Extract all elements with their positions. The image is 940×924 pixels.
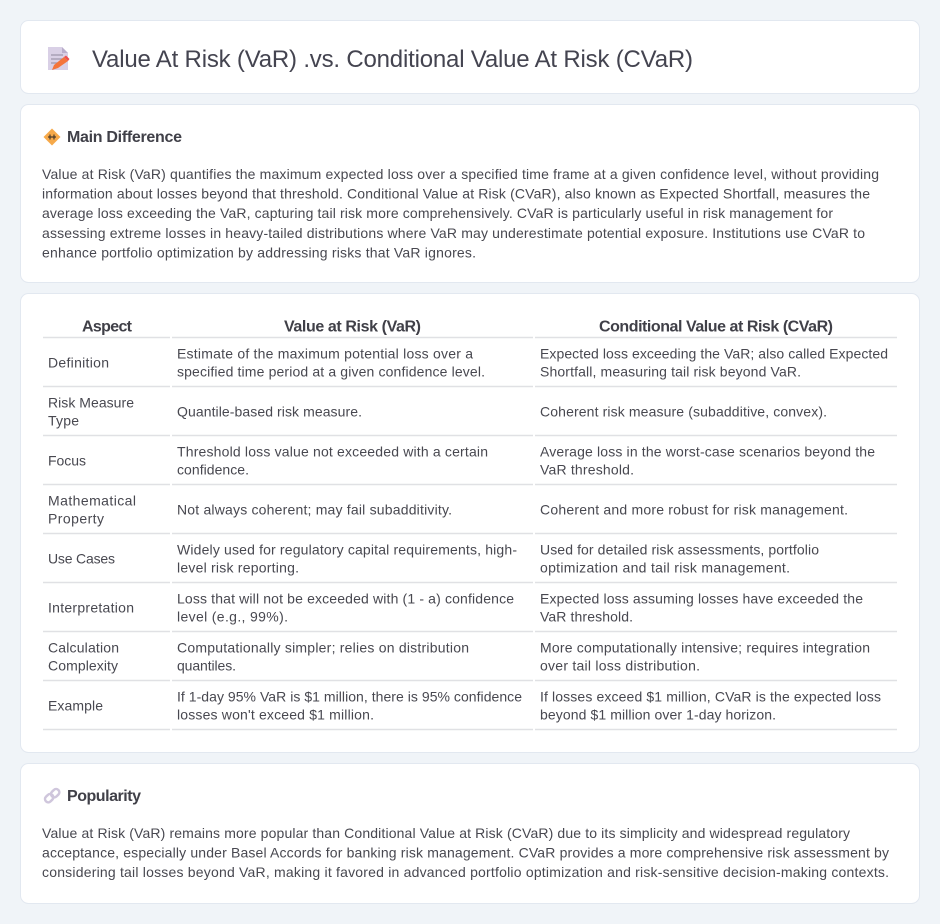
text block: popularity: considering tail losses beyond VaR, making it favored in advanced portfolio optimization and risk-sensitive decision-making contexts. <box>42 864 889 880</box>
icon: orange diamond <box>44 128 60 146</box>
row: use cases <box>48 542 819 576</box>
row: focus: VaR threshold. <box>540 462 634 478</box>
row: calculation complexity <box>48 640 870 674</box>
row: interpretation: Loss that will not be exceeded with (1 - a) confidence <box>177 590 514 606</box>
row: use cases: level risk reporting. <box>177 560 299 576</box>
icon: document with pencil <box>48 47 70 70</box>
row: focus: Focus <box>48 452 86 468</box>
row: calculation complexity: More computationally intensive; requires integration <box>540 640 870 656</box>
row: mathematical property: Coherent and more robust for risk management. <box>540 502 848 518</box>
row: interpretation: Interpretation <box>48 600 134 616</box>
row: example: Example <box>48 698 103 714</box>
row: definition: Expected loss exceeding the VaR; also called Expected <box>540 346 888 362</box>
text block: main difference <box>42 166 879 260</box>
row: example: beyond $1 million over 1-day horizon. <box>540 707 776 723</box>
row: use cases: optimization and tail risk management. <box>540 560 790 576</box>
row: risk measure type: Coherent risk measure (subadditive, convex). <box>540 404 827 420</box>
row: risk measure type: Risk Measure <box>48 394 134 410</box>
text block: main difference: enhance portfolio optimization by addressing risks that VaR ignores. <box>42 244 476 260</box>
row: risk measure type: Quantile-based risk measure. <box>177 404 362 420</box>
table header row <box>82 319 833 336</box>
row: mathematical property: Not always coherent; may fail subadditivity. <box>177 502 452 518</box>
row: calculation complexity: Complexity <box>48 658 118 674</box>
row: mathematical property: Property <box>48 511 104 527</box>
panel: popularity <box>20 764 920 904</box>
heading: main difference: Main Difference <box>67 129 182 146</box>
row: interpretation: level (e.g., 99%). <box>177 609 288 625</box>
text block: main difference: information about losses beyond that threshold. Conditional Value at Risk (CVaR), also known as Expected Shortfall, measures the <box>42 186 870 202</box>
row: definition <box>48 346 888 380</box>
row: example: If 1-day 95% VaR is $1 million, there is 95% confidence <box>177 688 522 704</box>
row: focus <box>48 444 875 478</box>
table header row: Value at Risk (VaR) <box>284 319 421 336</box>
row: calculation complexity: over tail loss distribution. <box>540 658 700 674</box>
table header row: Conditional Value at Risk (CVaR) <box>599 319 833 336</box>
row: calculation complexity: Computationally simpler; relies on distribution <box>177 640 469 656</box>
row: focus: Threshold loss value not exceeded with a certain <box>177 444 488 460</box>
text block: main difference: assessing extreme losses in heavy-tailed distributions where VaR may underestimate potential exposure. Institutions use CVaR to <box>42 225 865 241</box>
text block: main difference: Value at Risk (VaR) quantifies the maximum expected loss over a specified time frame at a given confidence level, without providing <box>42 166 879 182</box>
panel: main difference <box>20 104 920 282</box>
row: example: losses won't exceed $1 million. <box>177 707 374 723</box>
row: risk measure type <box>48 394 827 429</box>
text block: popularity: acceptance, especially under Basel Accords for banking risk management. CVaR provides a more comprehensive risk assessment by <box>42 845 889 861</box>
row: use cases: Widely used for regulatory capital requirements, high- <box>177 542 517 558</box>
table header row: Aspect <box>82 319 133 336</box>
icon: chain link <box>44 788 61 804</box>
heading: popularity: Popularity <box>67 788 141 805</box>
row: definition: Definition <box>48 354 109 370</box>
row: focus: confidence. <box>177 462 249 478</box>
row: interpretation <box>48 590 863 625</box>
title: Value At Risk (VaR) .vs. Conditional Value At Risk (CVaR) <box>92 46 693 73</box>
row: mathematical property: Mathematical <box>48 492 136 508</box>
row: interpretation: VaR threshold. <box>540 609 633 625</box>
row: mathematical property <box>48 492 848 527</box>
row: example: If losses exceed $1 million, CVaR is the expected loss <box>540 688 881 704</box>
text block: main difference: average loss exceeding the VaR, capturing tail risk more comprehensively. CVaR is particularly useful in risk management for <box>42 205 833 221</box>
panel: title header <box>20 20 920 94</box>
panel: comparison table <box>20 294 920 752</box>
row: risk measure type: Type <box>48 413 79 429</box>
text block: popularity <box>42 825 889 880</box>
row: definition: specified time period at a given confidence level. <box>177 364 485 380</box>
row: use cases: Use Cases <box>48 550 115 566</box>
row: use cases: Used for detailed risk assessments, portfolio <box>540 542 819 558</box>
row: definition: Estimate of the maximum potential loss over a <box>177 346 473 362</box>
row: focus: Average loss in the worst-case scenarios beyond the <box>540 444 875 460</box>
row: calculation complexity: quantiles. <box>177 658 236 674</box>
row: example <box>48 688 881 723</box>
text block: popularity: Value at Risk (VaR) remains more popular than Conditional Value at Risk (CVaR) due to its simplicity and widespread regulatory <box>42 825 850 841</box>
row: calculation complexity: Calculation <box>48 640 119 656</box>
row: definition: Shortfall, measuring tail risk beyond VaR. <box>540 364 801 380</box>
row: interpretation: Expected loss assuming losses have exceeded the <box>540 590 863 606</box>
